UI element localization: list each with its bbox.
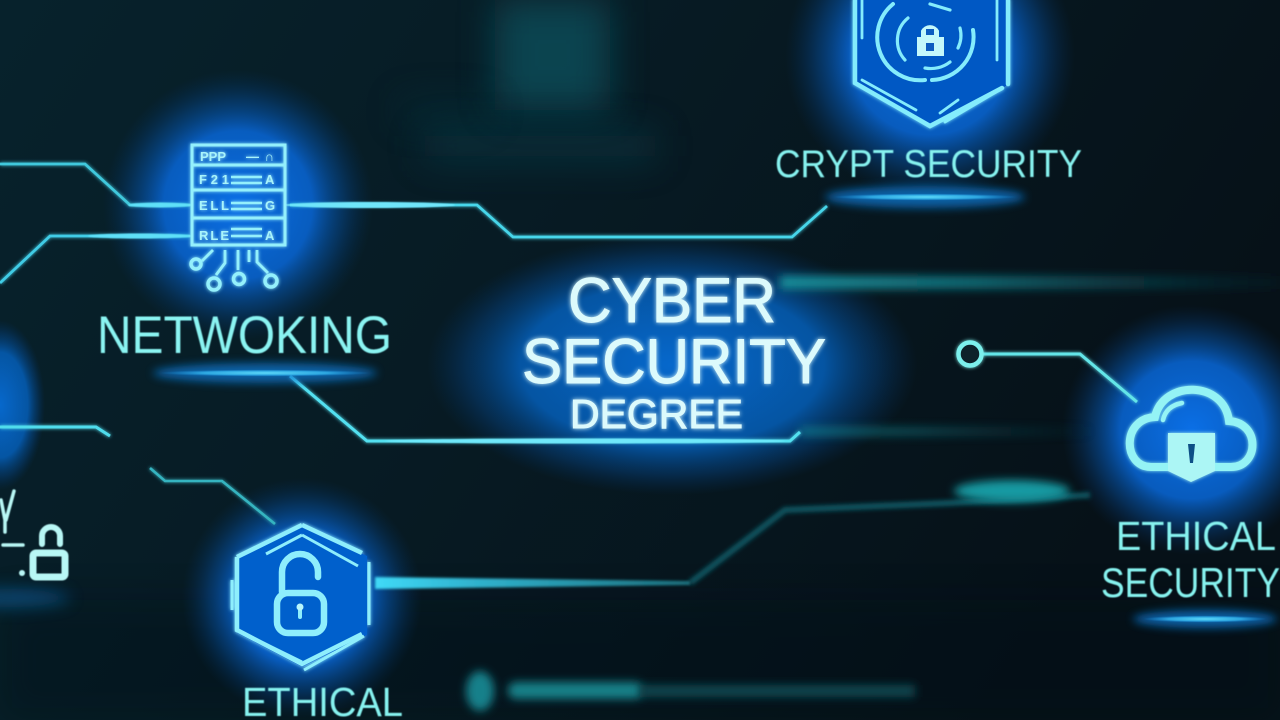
line: networking left upper [0,164,190,205]
line: node to cloud [982,354,1137,402]
icon: shield with lock [855,0,1008,126]
icon: server rack: G [265,198,275,213]
node circle [958,342,982,366]
icon: server rack: —∩ [246,149,274,164]
icon: server rack: ELL [199,198,229,213]
icon: hexagon with open lock [232,525,369,670]
blurred background traces [466,276,1280,711]
icon: server rack [191,145,285,290]
line: networking to crypt security [290,205,827,237]
icon: server rack: A [265,228,275,243]
line: to hexagon [150,468,275,524]
line: networking to degree [290,376,800,441]
icon: partial left lock [1,491,65,577]
title: CYBER [568,266,776,336]
line: networking left lower [0,236,190,283]
connector lines [0,164,1137,589]
icon: server rack: PPP [200,149,226,164]
icon: server rack: F21 [199,172,229,187]
title: SECURITY [522,327,826,397]
underglow: networking [153,363,377,383]
title: DEGREE [570,391,743,437]
title [522,266,826,437]
label: networking: NETWOKING [97,306,392,365]
bright line streaks [88,202,785,444]
label: ethical security right [1101,513,1280,606]
icon: server rack: RLE [199,228,229,243]
underglow: crypt security [825,186,1025,208]
icon: cloud with lock [1130,390,1252,482]
line: hexagon beam [375,577,690,589]
line: left middle [0,427,110,436]
icon: server rack: A [265,172,275,187]
underglow: ethical security [1133,610,1277,628]
label: crypt security: CRYPT SECURITY [775,143,1082,186]
